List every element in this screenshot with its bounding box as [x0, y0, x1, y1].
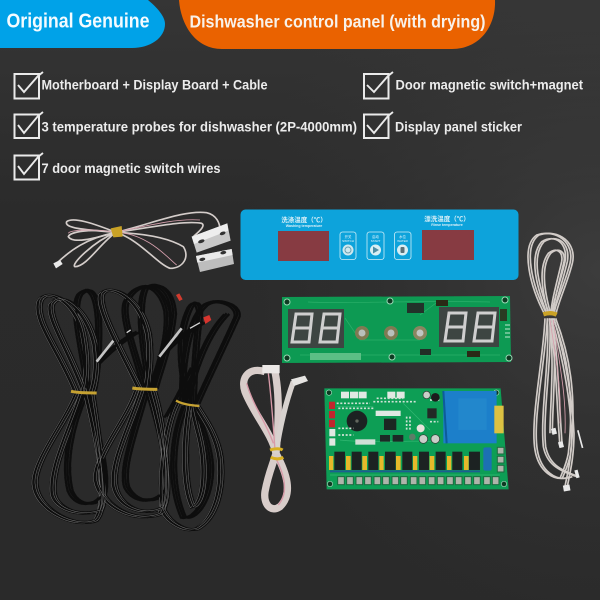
- flat ribbon cable: [244, 365, 308, 509]
- door magnetic switch with wires: [53, 212, 234, 272]
- display board PCB: [282, 296, 512, 363]
- display panel sticker: [240, 210, 518, 280]
- checklist item: Display panel sticker: Display panel sticker: [395, 120, 523, 134]
- button: switch: 开关: [345, 234, 352, 239]
- checklist item: Display panel sticker: [364, 112, 523, 138]
- rinse temperature label: Rinse temperature: [431, 223, 463, 227]
- relays: [334, 452, 480, 470]
- checklist item: 7 door magnetic switch wires: 7 door magnetic switch wires: [42, 161, 220, 176]
- checklist item: 7 door magnetic switch wires: [14, 153, 220, 180]
- push buttons: [355, 326, 427, 340]
- checklist item: Motherboard + Display Board + Cable: [14, 72, 268, 98]
- button: switch: [340, 232, 356, 260]
- button: start: 启动: [372, 234, 379, 239]
- main control board PCB: [324, 388, 509, 489]
- washing temperature label: [281, 215, 327, 228]
- right seven-segment digits: [439, 307, 499, 347]
- badge: Dishwasher control panel: Dishwasher control panel (with drying): [190, 12, 486, 32]
- checklist item: 3 temperature probes: 3 temperature probes for dishwasher (2P-4000mm): [42, 120, 357, 134]
- checklist item: Motherboard + Display Board + Cable: Motherboard + Display Board + Cable: [42, 78, 268, 92]
- button: start: [367, 232, 384, 260]
- button: water: 水位: [399, 234, 406, 239]
- badge: Dishwasher control panel: [179, 0, 495, 49]
- temperature probes: three black cable bundles: [32, 285, 240, 530]
- button: switch: SWITCH: [342, 239, 354, 243]
- badge: Original Genuine: Original Genuine: [6, 10, 150, 32]
- transformer: [443, 391, 497, 443]
- checklist item: Door magnetic switch+magnet: [364, 72, 584, 98]
- screw terminals: [338, 447, 504, 485]
- washing temperature label: Washing temperature: [286, 224, 322, 228]
- left seven-segment digits: [288, 309, 344, 348]
- checklist item: Door magnetic switch+magnet: Door magnetic switch+magnet: [396, 78, 584, 92]
- button: start: START: [371, 239, 380, 243]
- rinse temperature label: [424, 214, 470, 227]
- button: water: [394, 232, 411, 260]
- checklist item: 3 temperature probes: [14, 112, 357, 138]
- white door switch wires bundle: [528, 233, 583, 492]
- button: water: WATER: [397, 239, 409, 243]
- buzzer: [347, 411, 367, 431]
- washing temperature label: 洗涤温度（℃）: [281, 215, 327, 224]
- badge: Original Genuine: [0, 0, 165, 48]
- rinse temperature label: 漂洗温度（℃）: [424, 214, 470, 223]
- yellow capacitors: [329, 456, 469, 470]
